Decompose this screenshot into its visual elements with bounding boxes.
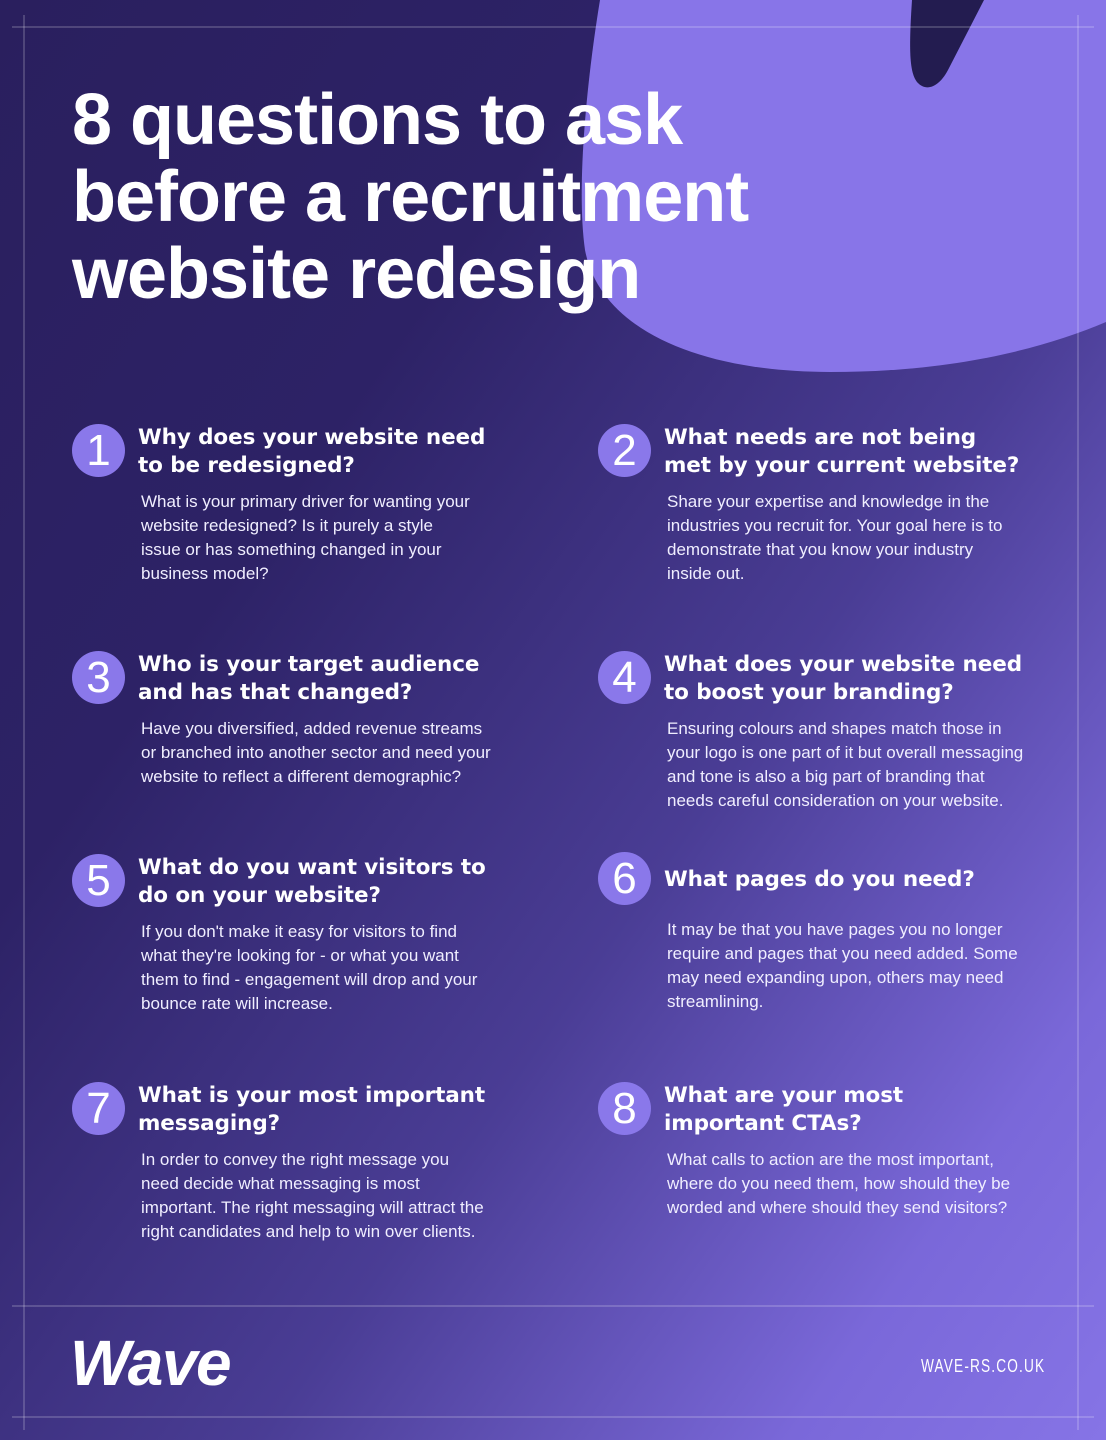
item 8: What are your most — [664, 1083, 903, 1108]
item 5: bounce rate will increase. — [141, 994, 333, 1013]
item 7: In order to convey the right message you — [141, 1150, 449, 1169]
item 2: demonstrate that you know your industry — [667, 540, 973, 559]
item 1: What is your primary driver for wanting your — [141, 492, 470, 511]
title: website redesign — [72, 234, 640, 314]
title — [72, 80, 748, 314]
item 5: what they're looking for - or what you want — [141, 946, 459, 965]
item 3: and has that changed? — [138, 680, 412, 705]
item 2 — [598, 424, 1019, 583]
item 3: Who is your target audience — [138, 652, 479, 677]
item 1: issue or has something changed in your — [141, 540, 442, 559]
item 2: What needs are not being — [664, 425, 976, 450]
item 4 — [598, 651, 1023, 810]
item 4: What does your website need — [664, 652, 1022, 677]
item 8 — [598, 1082, 1010, 1217]
item 6: What pages do you need? — [664, 867, 975, 892]
item 7: messaging? — [138, 1111, 280, 1136]
item 4: Ensuring colours and shapes match those in — [667, 719, 1002, 738]
item 8: important CTAs? — [664, 1111, 862, 1136]
item 3: or branched into another sector and need your — [141, 743, 491, 762]
item 5: them to find - engagement will drop and your — [141, 970, 477, 989]
item 5: 5 — [86, 856, 111, 905]
item 2: Share your expertise and knowledge in the — [667, 492, 989, 511]
item 1 — [72, 424, 485, 583]
item 7: right candidates and help to win over clients. — [141, 1222, 476, 1241]
item 8: worded and where should they send visitors? — [667, 1198, 1007, 1217]
item 2: 2 — [612, 426, 637, 475]
item 3: Have you diversified, added revenue streams — [141, 719, 482, 738]
item 4: 4 — [612, 653, 637, 702]
item 4: to boost your branding? — [664, 680, 954, 705]
item 8: 8 — [612, 1084, 637, 1133]
item 8: where do you need them, how should they be — [667, 1174, 1010, 1193]
website url: WAVE-RS.CO.UK — [921, 1356, 1045, 1376]
item 7: What is your most important — [138, 1083, 485, 1108]
item 6: may need expanding upon, others may need — [667, 968, 1003, 987]
item 2: industries you recruit for. Your goal here is to — [667, 516, 1002, 535]
item 5 — [72, 854, 486, 1013]
logo: Wave — [70, 1327, 230, 1399]
item 3: 3 — [86, 653, 111, 702]
item 4: your logo is one part of it but overall messaging — [667, 743, 1023, 762]
item 6: It may be that you have pages you no longer — [667, 920, 1003, 939]
item 5: do on your website? — [138, 883, 381, 908]
title: 8 questions to ask — [72, 80, 682, 160]
item 2: inside out. — [667, 564, 744, 583]
item 3: website to reflect a different demographic? — [141, 767, 461, 786]
item 6 — [598, 852, 1018, 1011]
item 5: If you don't make it easy for visitors to find — [141, 922, 457, 941]
item 4: and tone is also a big part of branding that — [667, 767, 985, 786]
item 5: What do you want visitors to — [138, 855, 486, 880]
item 6: 6 — [612, 854, 637, 903]
title: before a recruitment — [72, 157, 748, 237]
item 1: Why does your website need — [138, 425, 485, 450]
item 7 — [72, 1082, 485, 1241]
item 8: What calls to action are the most important, — [667, 1150, 994, 1169]
item 7: important. The right messaging will attract the — [141, 1198, 484, 1217]
item 1: 1 — [86, 426, 111, 475]
item 7: 7 — [86, 1084, 111, 1133]
item 6: streamlining. — [667, 992, 763, 1011]
item 2: met by your current website? — [664, 453, 1019, 478]
item 1: website redesigned? Is it purely a style — [141, 516, 433, 535]
item 1: to be redesigned? — [138, 453, 355, 478]
item 1: business model? — [141, 564, 269, 583]
item 4: needs careful consideration on your website. — [667, 791, 1003, 810]
item 7: need decide what messaging is most — [141, 1174, 420, 1193]
item 3 — [72, 651, 491, 786]
item 6: require and pages that you need added. Some — [667, 944, 1018, 963]
